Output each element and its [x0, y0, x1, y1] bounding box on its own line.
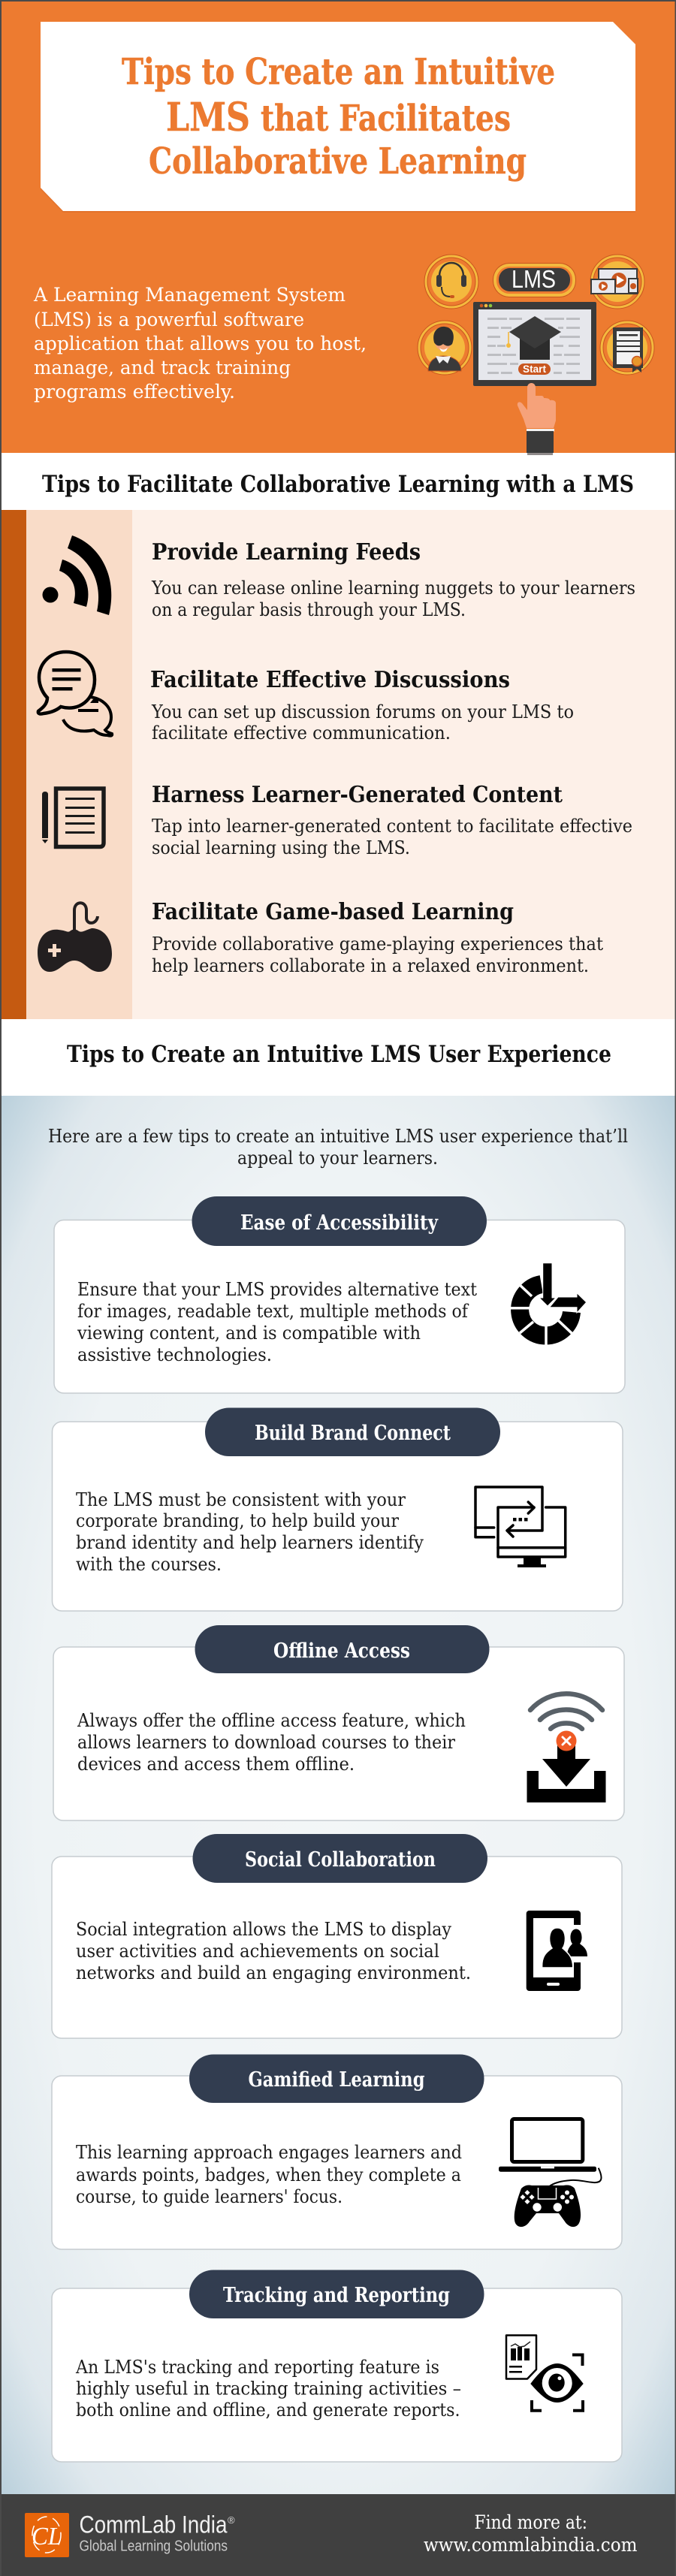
panel: collaborative learning tips	[0, 510, 676, 1019]
icon: laptop and gamepad	[499, 2119, 602, 2227]
body text: assistive technologies.	[77, 1344, 272, 1365]
pill heading	[189, 2270, 484, 2318]
icon: notebook and pencil	[42, 789, 104, 847]
website link: Find more at:	[475, 2511, 587, 2533]
icon: report and eye	[506, 2336, 584, 2411]
start button: Start	[523, 363, 546, 375]
tip 4 text: Provide collaborative game-playing experiences that	[152, 934, 603, 955]
title text	[122, 51, 555, 182]
body text: highly useful in tracking training activities –	[76, 2378, 461, 2399]
orange header band	[0, 0, 676, 455]
icon: rss feed	[42, 535, 111, 615]
tip 2 text: facilitate effective communication.	[152, 722, 451, 744]
icon: game controller	[38, 903, 112, 972]
icon: video devices circle	[591, 256, 643, 307]
tip 3 text: Harness Learner-Generated Content	[152, 782, 563, 808]
screen	[473, 302, 596, 386]
tip 4 text: help learners collaborate in a relaxed environment.	[152, 955, 589, 976]
body text: Always offer the offline access feature, which	[77, 1710, 466, 1731]
company name	[80, 2511, 235, 2555]
title text: that Facilitates	[261, 98, 511, 140]
pill heading: Social Collaboration	[245, 1848, 436, 1872]
tip 1 text: You can release online learning nuggets to your learners	[151, 578, 635, 599]
body text: both online and offline, and generate reports.	[76, 2400, 460, 2421]
icon: pointing hand	[518, 383, 556, 455]
intro paragraph: application that allows you to host,	[34, 333, 367, 355]
panel: user experience tips	[0, 1096, 676, 2494]
body text	[76, 1489, 424, 1575]
tip 3 text	[152, 782, 632, 858]
intro sentence: appeal to your learners.	[237, 1148, 438, 1169]
body text: Ensure that your LMS provides alternative text	[77, 1279, 477, 1300]
pill heading: Tracking and Reporting	[223, 2284, 450, 2307]
body text	[75, 2357, 461, 2421]
body text	[77, 1279, 477, 1365]
card: gamified learning	[52, 2055, 622, 2249]
icon: phone with users	[527, 1911, 587, 1991]
tip 1 text: on a regular basis through your LMS.	[152, 599, 466, 620]
body text: for images, readable text, multiple methods of	[77, 1301, 469, 1322]
icon: discussion bubbles	[38, 652, 112, 736]
tip 3 text: social learning using the LMS.	[152, 837, 410, 858]
icon: LMS badge	[493, 263, 576, 297]
card: build brand connect	[53, 1407, 623, 1611]
intro paragraph: A Learning Management System	[33, 284, 346, 306]
body text	[76, 1919, 471, 1983]
card: offline access	[53, 1625, 624, 1820]
website link	[424, 2511, 638, 2556]
pill heading	[205, 1407, 500, 1456]
icon: LMS badge: LMS	[512, 265, 556, 293]
pill heading: Gamified Learning	[248, 2068, 425, 2092]
body text: viewing content, and is compatible with	[77, 1323, 421, 1344]
body text: devices and access them offline.	[77, 1754, 355, 1775]
icon: offline download	[527, 1694, 605, 1802]
logo: CL	[32, 2523, 62, 2550]
icon: learner circle	[419, 322, 470, 373]
body text	[76, 2142, 462, 2207]
title panel	[41, 22, 635, 213]
tip 1 text: Provide Learning Feeds	[152, 539, 421, 566]
company name: ®	[228, 2514, 235, 2526]
tip 2 text: Facilitate Effective Discussions	[150, 667, 510, 693]
body text: allows learners to download courses to their	[77, 1732, 455, 1753]
body text: brand identity and help learners identify	[76, 1532, 424, 1553]
body text: An LMS's tracking and reporting feature is	[75, 2357, 439, 2378]
tip 3 text: Tap into learner-generated content to facilitate effective	[152, 816, 632, 837]
intro paragraph: (LMS) is a powerful software	[34, 309, 304, 331]
title text: LMS	[166, 95, 250, 140]
body text	[77, 1710, 466, 1775]
title text: Tips to Create an Intuitive	[122, 51, 555, 93]
icon: accessibility ring	[509, 1263, 587, 1348]
intro sentence: Here are a few tips to create an intuitive LMS user experience that’ll	[48, 1126, 628, 1147]
card: ease of accessibility	[54, 1196, 625, 1393]
company name: CommLab India	[80, 2511, 228, 2538]
body text: course, to guide learners' focus.	[76, 2186, 343, 2207]
icon: graduation cap	[506, 316, 561, 360]
body text: The LMS must be consistent with your	[76, 1489, 406, 1510]
pill heading	[192, 1834, 487, 1883]
card: social collaboration	[52, 1834, 622, 2038]
pill heading	[195, 1625, 490, 1673]
pill heading: Offline Access	[273, 1639, 410, 1663]
body text: This learning approach engages learners and	[76, 2142, 462, 2163]
intro paragraph	[33, 284, 367, 403]
intro paragraph: programs effectively.	[34, 381, 235, 403]
card: tracking and reporting	[52, 2270, 622, 2462]
company name: Global Learning Solutions	[80, 2538, 228, 2555]
logo	[25, 2513, 69, 2557]
body text: awards points, badges, when they complete a	[76, 2164, 461, 2185]
pill heading: Build Brand Connect	[255, 1422, 451, 1445]
tip 4 text	[152, 899, 603, 976]
icon: certificate circle	[602, 322, 653, 373]
icon: synced monitors	[475, 1487, 566, 1567]
footer	[0, 2494, 676, 2576]
body text: networks and build an engaging environment.	[76, 1962, 471, 1983]
pill heading	[189, 2055, 484, 2103]
title text: Collaborative Learning	[149, 140, 527, 182]
pill heading: Ease of Accessibility	[240, 1211, 439, 1235]
tip 4 text: Facilitate Game-based Learning	[152, 899, 514, 925]
website link: www.commlabindia.com	[424, 2534, 638, 2556]
intro paragraph: manage, and track training	[34, 357, 291, 379]
icon: headset circle	[426, 256, 477, 307]
body text: with the courses.	[76, 1554, 222, 1575]
tip 2 text: You can set up discussion forums on your LMS to	[151, 701, 574, 722]
intro sentence	[48, 1126, 628, 1169]
tip 1 text	[151, 539, 635, 620]
tip 2 text	[150, 667, 574, 744]
body text: user activities and achievements on social	[76, 1941, 439, 1962]
body text: Social integration allows the LMS to display	[76, 1919, 451, 1940]
LMS illustration	[419, 256, 653, 455]
pill heading	[192, 1196, 487, 1246]
body text: corporate branding, to help build your	[76, 1510, 399, 1531]
